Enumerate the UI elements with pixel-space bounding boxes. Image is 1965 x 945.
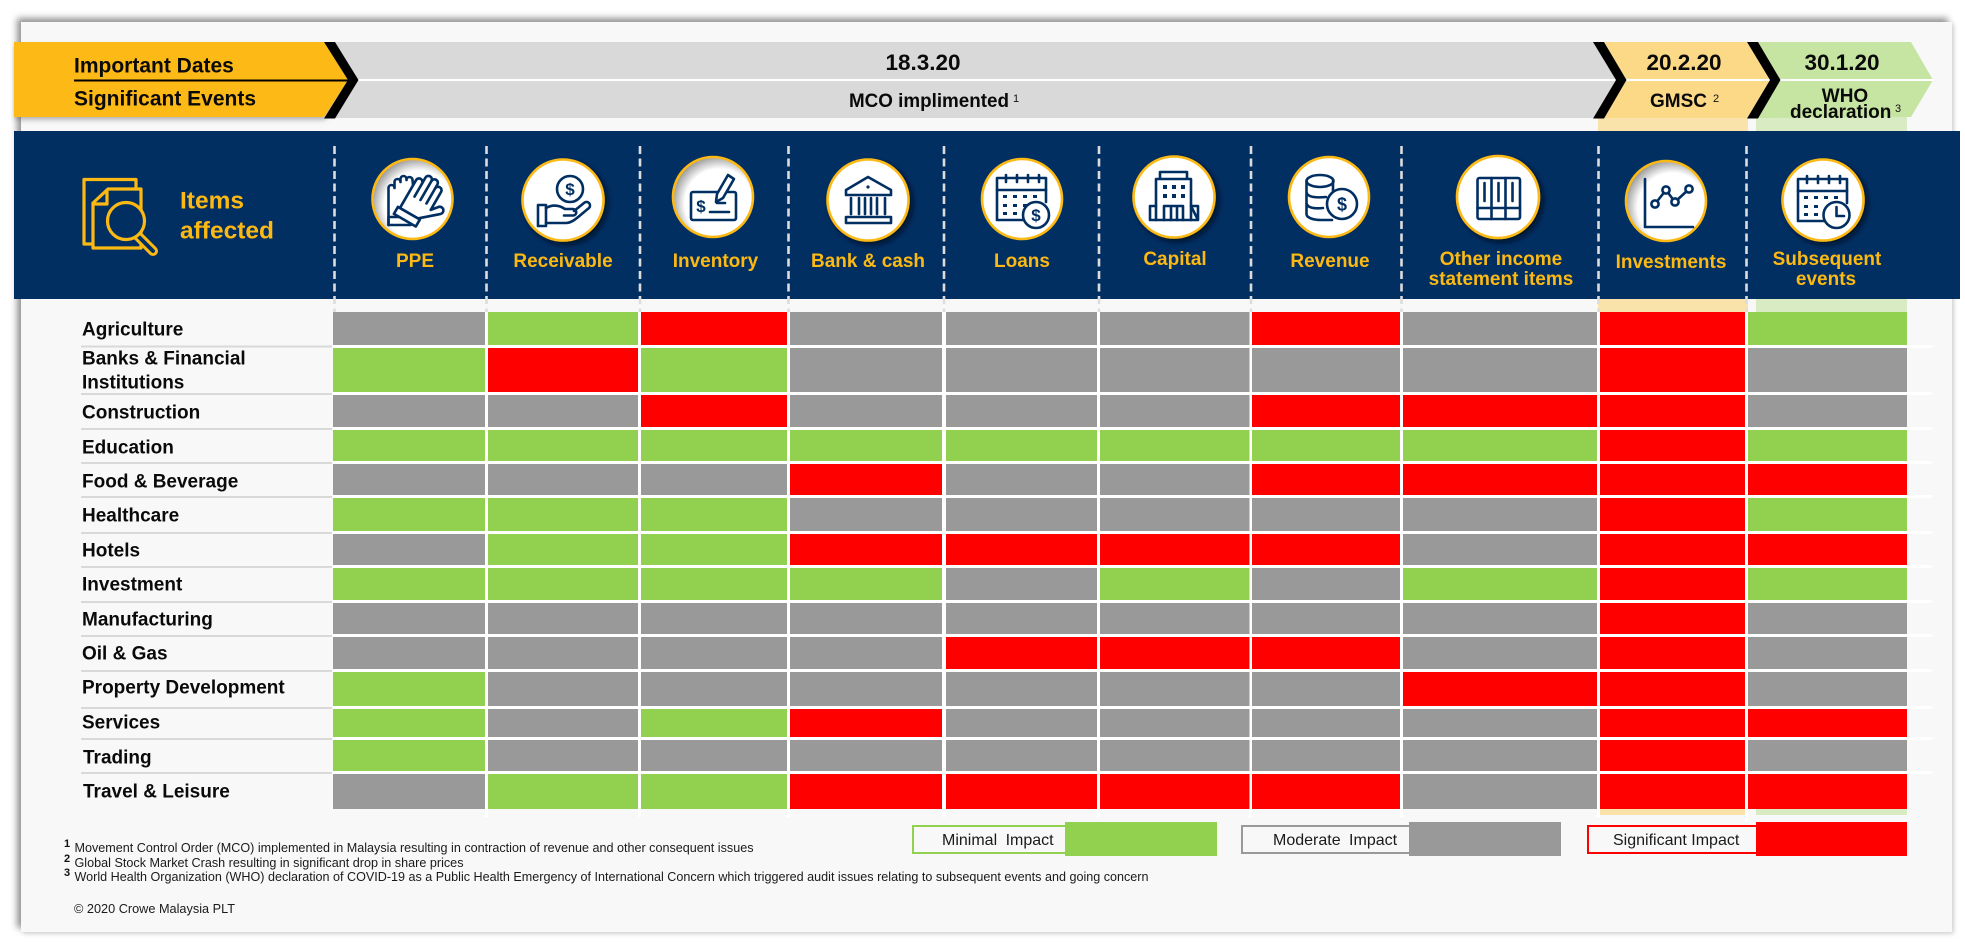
heading: items affected: Items <box>180 188 244 214</box>
row: Services <box>82 709 1907 737</box>
row: Investment <box>82 568 1907 600</box>
column headings: Other income <box>1440 249 1562 270</box>
row: Healthcare: Healthcare <box>82 506 179 526</box>
row: Property Development <box>82 672 1907 706</box>
event: MCO implemented: 1 <box>1013 93 1019 105</box>
column headings: Capital <box>1143 249 1207 270</box>
light yellow column band <box>1598 117 1748 131</box>
row: Hotels: Hotels <box>82 540 140 562</box>
row: Travel & Leisure: Travel & Leisure <box>83 782 230 802</box>
row: Services: Services <box>82 712 160 734</box>
divider in orange arrow <box>74 80 348 82</box>
legend: moderate impact: Moderate Impact <box>1273 832 1398 849</box>
copyright: © 2020 Crowe Malaysia PLT <box>74 901 235 916</box>
row: Food & Beverage <box>82 464 1907 495</box>
icon: inventory cheque and pen: $ <box>696 197 706 216</box>
event: WHO declaration <box>1790 86 1901 123</box>
column headings: Revenue <box>1290 251 1370 272</box>
column headings: Inventory <box>673 251 759 272</box>
icon: investments line chart <box>1626 161 1706 241</box>
legend: moderate impact <box>1242 822 1561 856</box>
footnotes <box>64 838 1148 884</box>
icon: receivable hand and coin <box>522 160 604 240</box>
heading: items affected <box>180 188 274 244</box>
column headings: Bank & cash <box>811 251 925 272</box>
timeline bar: 20.2.20 yellow segment <box>1604 42 1770 118</box>
icon: binders <box>1457 156 1539 238</box>
heading: significant events: Significant Events <box>74 88 256 110</box>
legend: minimal impact: Minimal Impact <box>942 832 1054 849</box>
column headings: Investments <box>1616 252 1726 273</box>
timeline bar: 18.3.20 grey segment <box>335 42 1616 118</box>
row: Food & Beverage: Food & Beverage <box>82 472 238 492</box>
icon: receivable hand and coin: $ <box>565 180 575 199</box>
icon: revenue coins: $ <box>1337 194 1347 214</box>
row: Property Development: Property Development <box>82 678 285 698</box>
row: Construction: Construction <box>82 402 200 424</box>
column headings: Loans <box>994 251 1050 272</box>
row: Banks & Financial Institutions: Institutions <box>82 372 184 394</box>
column headings: PPE <box>396 251 434 272</box>
icon: loans calendar <box>982 159 1062 239</box>
icon: document with magnifier <box>84 180 153 251</box>
row: Manufacturing <box>82 603 1907 634</box>
icon: capital office tower <box>1134 156 1214 238</box>
column headings: events <box>1796 269 1856 290</box>
row: Education: Education <box>82 438 174 458</box>
row: Oil & Gas <box>82 637 1907 669</box>
icon: subsequent events calendar and clock <box>1782 160 1864 240</box>
row: Banks & Financial Institutions: Banks & Financial <box>82 348 246 370</box>
grid backing and separators <box>81 312 1931 822</box>
icon: loans calendar: $ <box>1031 206 1041 225</box>
date: 30.1.20: 30.1.20 <box>1804 50 1880 75</box>
column dashed separators <box>334 146 1746 316</box>
light green column band <box>1756 117 1907 131</box>
event: GMSC: GMSC <box>1650 91 1707 112</box>
icon: inventory cheque and pen <box>673 157 753 237</box>
row: Trading <box>83 740 1907 771</box>
footnotes: 2 <box>64 853 70 865</box>
footnotes: 3 <box>64 867 70 879</box>
heading: important dates: Important Dates <box>74 54 234 78</box>
row: Agriculture <box>82 312 1907 345</box>
event: MCO implemented: MCO implimented <box>849 91 1009 112</box>
row: Travel & Leisure <box>83 774 1907 809</box>
event: GMSC: 2 <box>1713 93 1719 105</box>
heading: items affected: affected <box>180 218 274 244</box>
timeline banner <box>14 42 1933 131</box>
navy header band <box>14 131 1960 299</box>
event: WHO declaration: WHO <box>1822 86 1868 107</box>
column headings: Subsequent <box>1773 249 1882 270</box>
event: WHO declaration: 3 <box>1895 103 1901 115</box>
event: WHO declaration: declaration <box>1790 102 1891 123</box>
legend: significant impact <box>1588 822 1907 856</box>
column headings: Receivable <box>513 251 613 272</box>
row: Healthcare <box>82 498 1907 531</box>
legend: significant impact: Significant Impact <box>1613 832 1740 849</box>
footnotes: World Health Organization (WHO) declaration of COVID-19 as a Public Health Emergency of International Concern which triggered audit issues relating to subsequent events and going concern <box>74 869 1148 884</box>
column headings: statement items <box>1429 269 1573 290</box>
row: Banks & Financial Institutions <box>82 348 1907 394</box>
date: 18.3.20: 18.3.20 <box>885 50 961 75</box>
timeline bar: 30.1.20 green segment <box>1758 42 1933 118</box>
icon: bank building <box>828 160 908 240</box>
black chevrons <box>324 42 1780 118</box>
row: Hotels <box>82 534 1907 565</box>
light column strips below header <box>1598 299 1907 815</box>
row: Manufacturing: Manufacturing <box>82 610 213 630</box>
row: Investment: Investment <box>82 574 183 596</box>
footnotes: Global Stock Market Crash resulting in significant drop in share prices <box>74 855 464 870</box>
row: Trading: Trading <box>83 748 152 768</box>
row: Construction <box>82 395 1907 427</box>
icon: PPE gloves <box>372 159 455 239</box>
footnotes: Movement Control Order (MCO) implemented in Malaysia resulting in contraction of revenue and other consequent issues <box>74 840 754 855</box>
row divider in timeline <box>358 79 1933 81</box>
orange heading arrow <box>14 42 348 117</box>
row: Agriculture: Agriculture <box>82 320 183 340</box>
row: Education <box>82 430 1907 461</box>
column headings <box>396 249 1882 290</box>
date: 20.2.20: 20.2.20 <box>1646 50 1722 75</box>
legend: minimal impact <box>913 822 1217 856</box>
icon: revenue coins <box>1289 157 1369 237</box>
footnotes: 1 <box>64 838 70 850</box>
row: Oil & Gas: Oil & Gas <box>82 644 168 664</box>
